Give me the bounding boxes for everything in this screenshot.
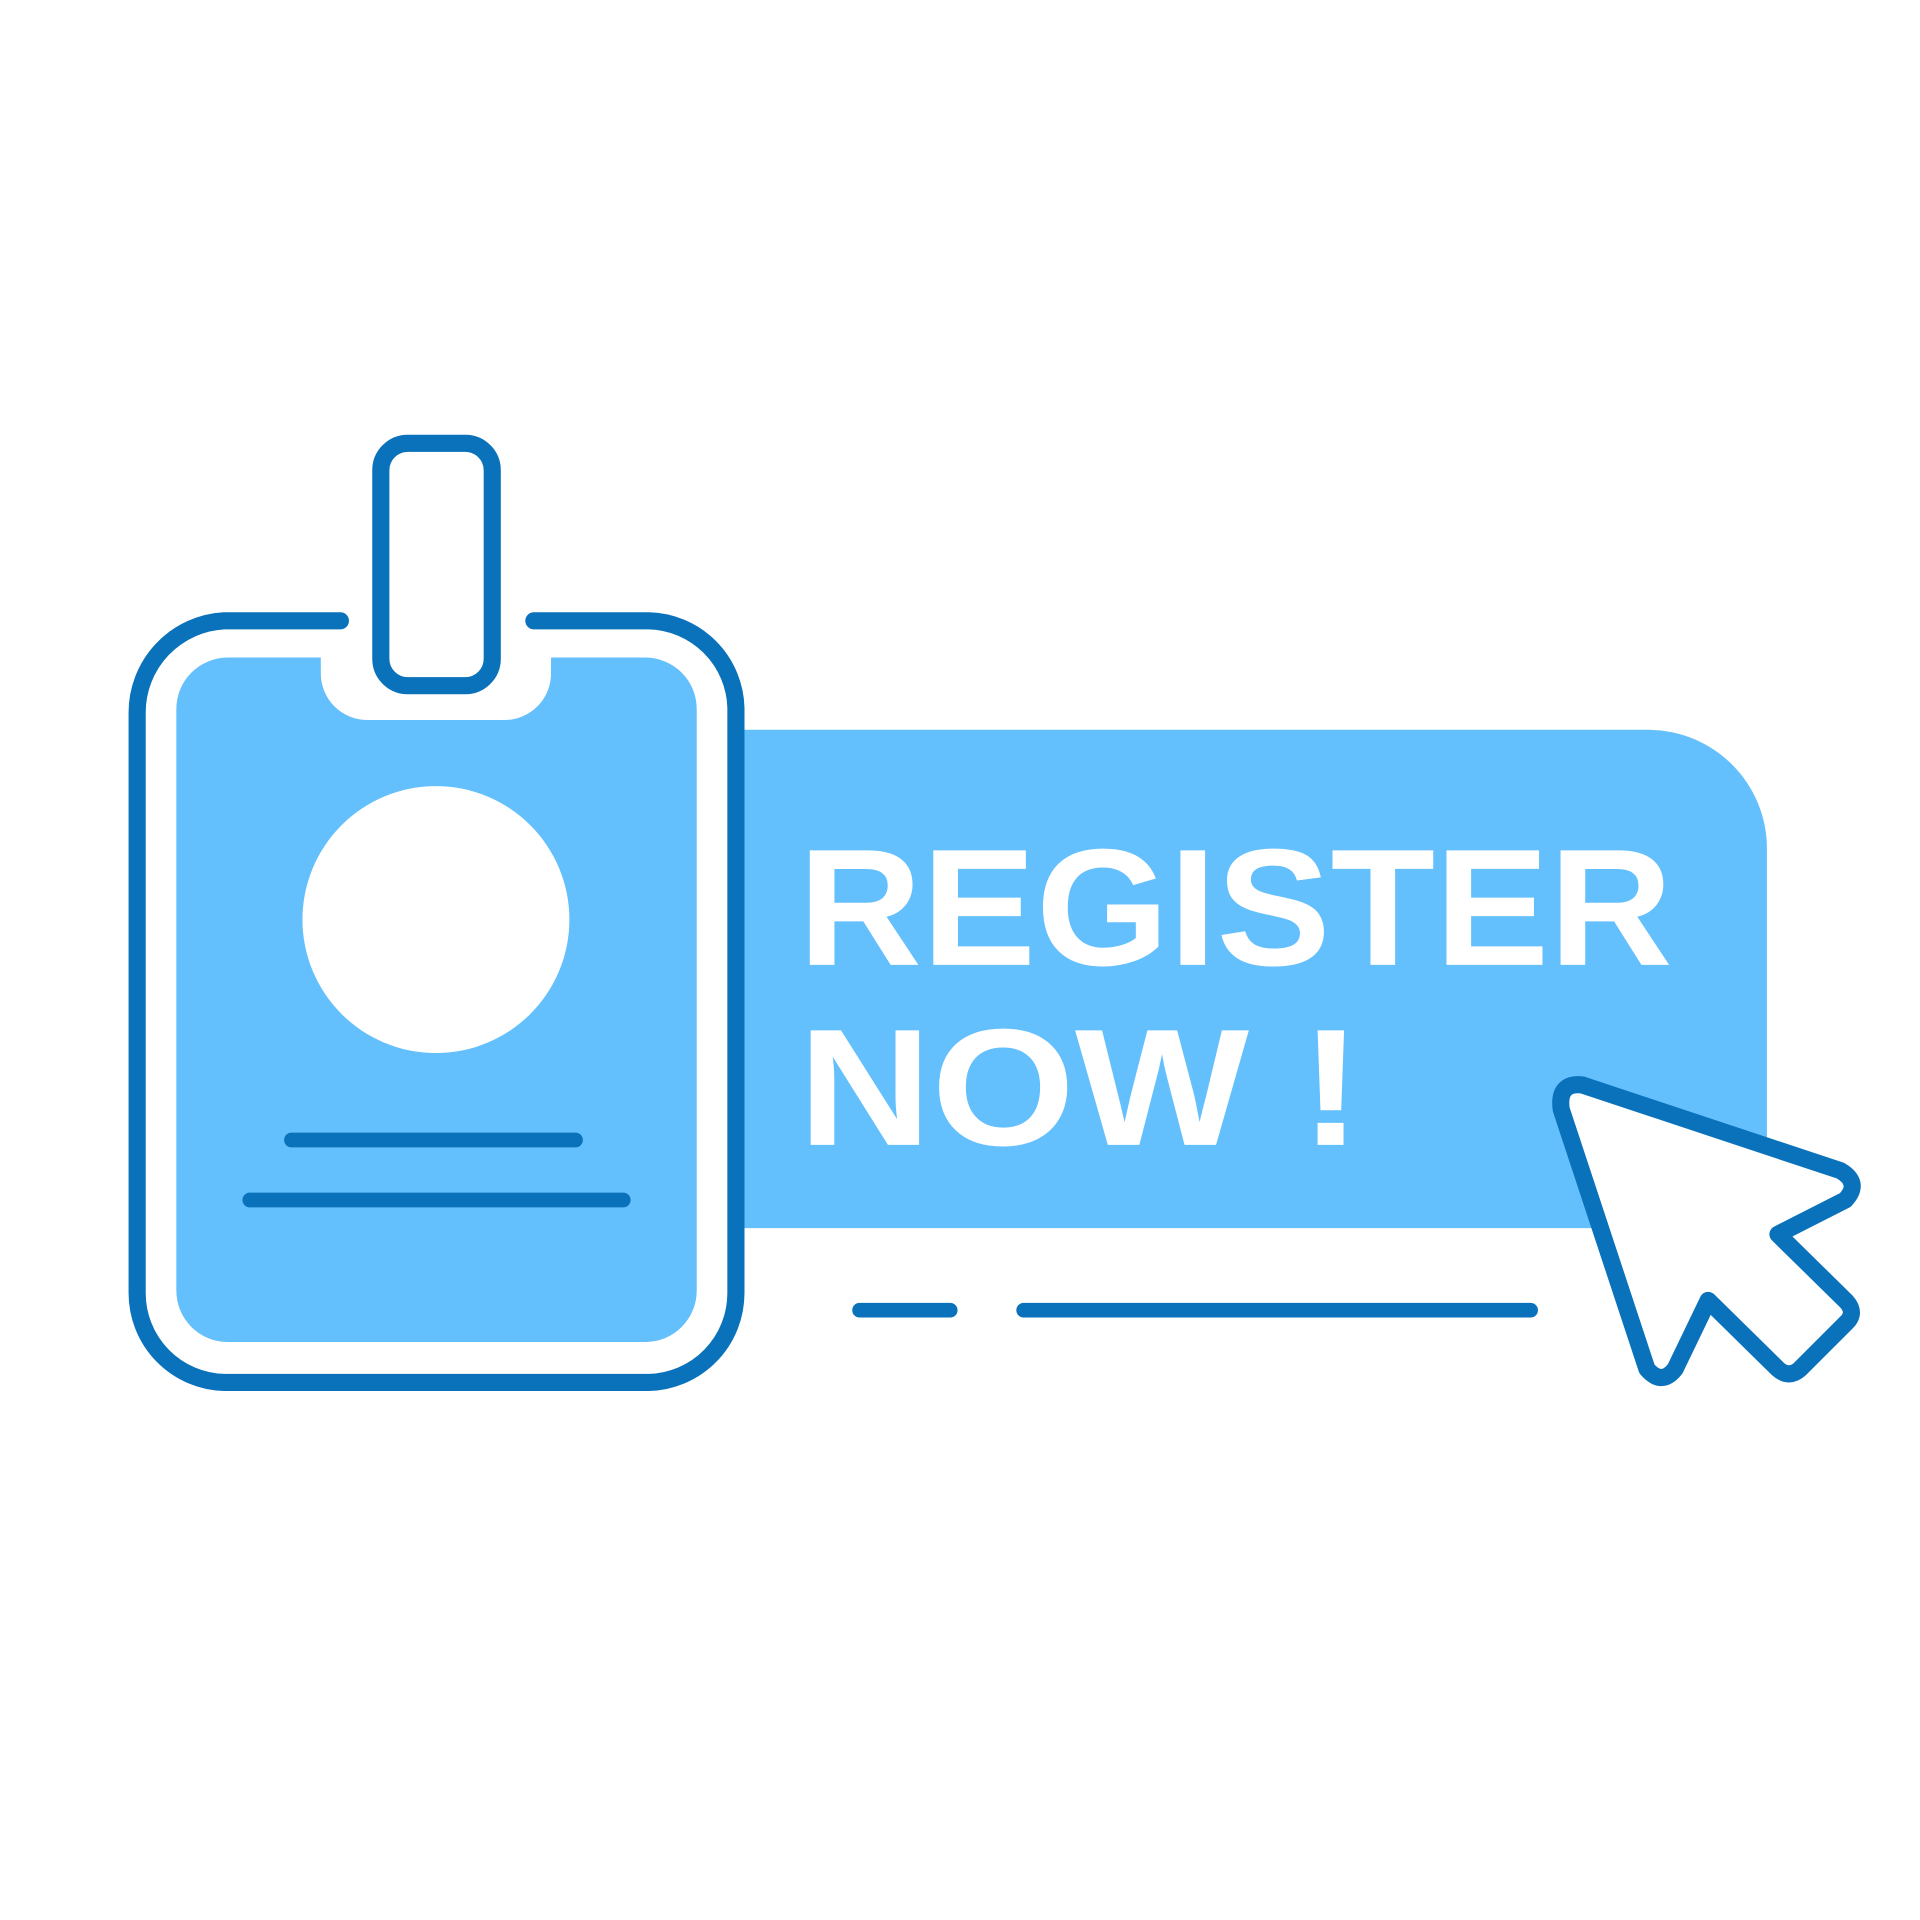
banner: register now xyxy=(722,730,1767,1228)
icon: cursor xyxy=(1561,1085,1852,1378)
heading: register now: NOW ! xyxy=(798,995,1362,1181)
underline dashes xyxy=(860,1304,1531,1316)
clip xyxy=(381,443,492,686)
heading: register now xyxy=(798,815,1673,1181)
heading: register now: REGISTER xyxy=(798,815,1673,1001)
icon: id badge xyxy=(137,443,736,1382)
photo circle xyxy=(302,786,569,1053)
text lines xyxy=(250,1140,623,1200)
